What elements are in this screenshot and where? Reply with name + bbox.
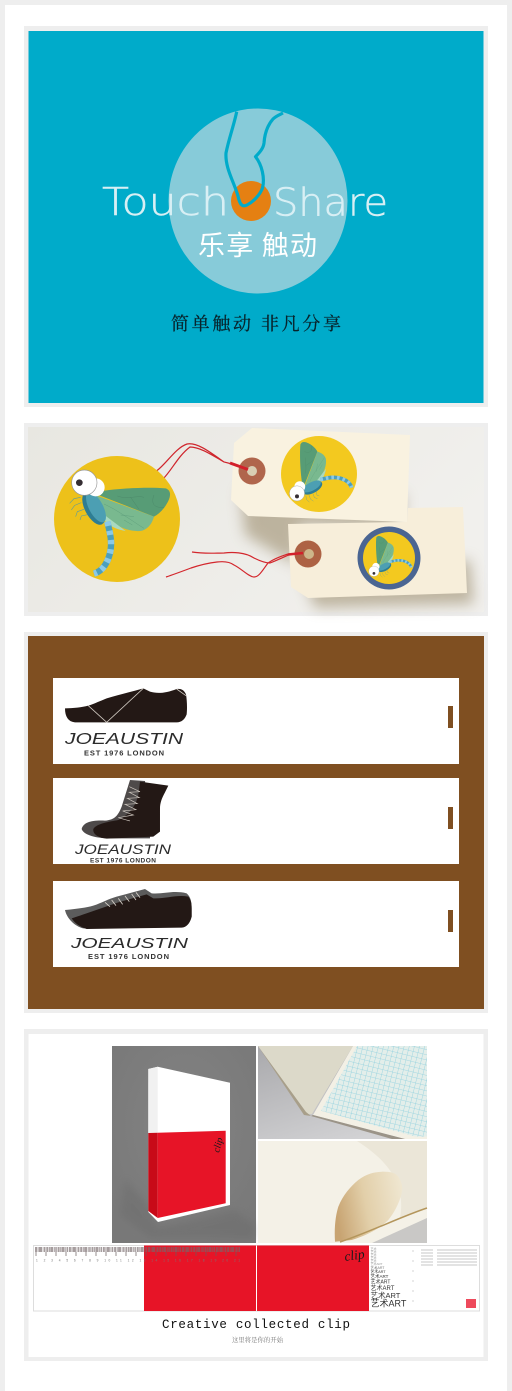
photo: grid notebook: [258, 1046, 430, 1139]
tag badge: yellow: [281, 436, 357, 512]
brand name: JOEAUSTIN: [70, 935, 188, 952]
tag shadows: [240, 490, 474, 608]
icon: shoe 3: [65, 889, 192, 929]
ruler marks: 1 2 3 4 5 6 7 8 9 10 11 12 13 14 15 16 17 18 19 20 21: [36, 1258, 240, 1262]
tag: back: [288, 507, 467, 598]
type specimen: 艺术ART: [370, 1261, 383, 1266]
label card 1: [53, 678, 459, 764]
icon: finger outline: [226, 112, 283, 206]
tagline: EST 1976 LONDON: [88, 952, 169, 961]
string: upper: [155, 444, 232, 479]
brown tab: [448, 910, 453, 932]
ruler marks: [35, 1250, 240, 1262]
type specimen: 艺术ART: [370, 1298, 407, 1308]
red stamp: [466, 1299, 476, 1308]
type specimen: 艺术: [370, 1258, 377, 1263]
orange touch dot: [231, 181, 271, 221]
panel: dragonfly tags photo: [24, 423, 488, 616]
type specimen: 艺术: [370, 1252, 377, 1257]
panel: JOEAUSTIN shoe labels: [24, 632, 488, 1013]
panel: Touch Share logo: [24, 26, 488, 407]
main yellow badge: [54, 456, 180, 582]
tagline: EST 1976 LONDON: [90, 858, 156, 864]
string: lower: [166, 552, 293, 577]
clip script: clip: [343, 1246, 366, 1264]
type specimen: 艺术: [370, 1255, 377, 1260]
type specimen: 艺术: [370, 1249, 377, 1254]
wordmark: Share: [273, 180, 388, 224]
brown tab: [448, 706, 453, 728]
book mockup: clip: [211, 1136, 226, 1154]
caption title: Creative collected clip: [162, 1318, 350, 1332]
brand name: JOEAUSTIN: [74, 842, 171, 857]
wordmark: Touch: [102, 180, 229, 224]
type specimen: 艺术: [370, 1246, 377, 1251]
label card 2: [53, 778, 459, 864]
brown tab: [448, 807, 453, 829]
type specimen: 艺术ART: [370, 1278, 390, 1286]
slogan: 简单触动 非凡分享: [171, 310, 341, 336]
type specimen: [370, 1246, 407, 1308]
brand name: JOEAUSTIN: [64, 731, 184, 748]
type specimen: 艺术ART: [370, 1290, 401, 1300]
type specimen: 艺术ART: [370, 1273, 389, 1280]
wordmark: [102, 180, 388, 224]
tag badge: blue ring: [358, 526, 420, 590]
tag eyelets: [230, 458, 322, 568]
caption subtitle: 这里将是你的开始: [232, 1335, 284, 1344]
type specimen: 艺术ART: [370, 1265, 385, 1270]
type specimen: 艺术ART: [370, 1284, 395, 1292]
logo circle: [168, 108, 348, 294]
photo: curled page: [258, 1141, 427, 1243]
spec table: [413, 1250, 477, 1302]
icon: shoe 1: [65, 688, 187, 722]
ruler strip: [34, 1246, 480, 1311]
tag: front: [231, 428, 410, 522]
label card 3: [53, 881, 459, 967]
panel: creative collected clip: [24, 1029, 488, 1361]
icon: boot: [82, 780, 168, 839]
type specimen: 艺术ART: [370, 1269, 386, 1274]
Chinese wordmark: 乐享 触动: [198, 224, 317, 263]
tagline: EST 1976 LONDON: [84, 748, 164, 758]
icon: dragonfly large: [70, 470, 170, 574]
book mockup: [112, 1046, 256, 1243]
